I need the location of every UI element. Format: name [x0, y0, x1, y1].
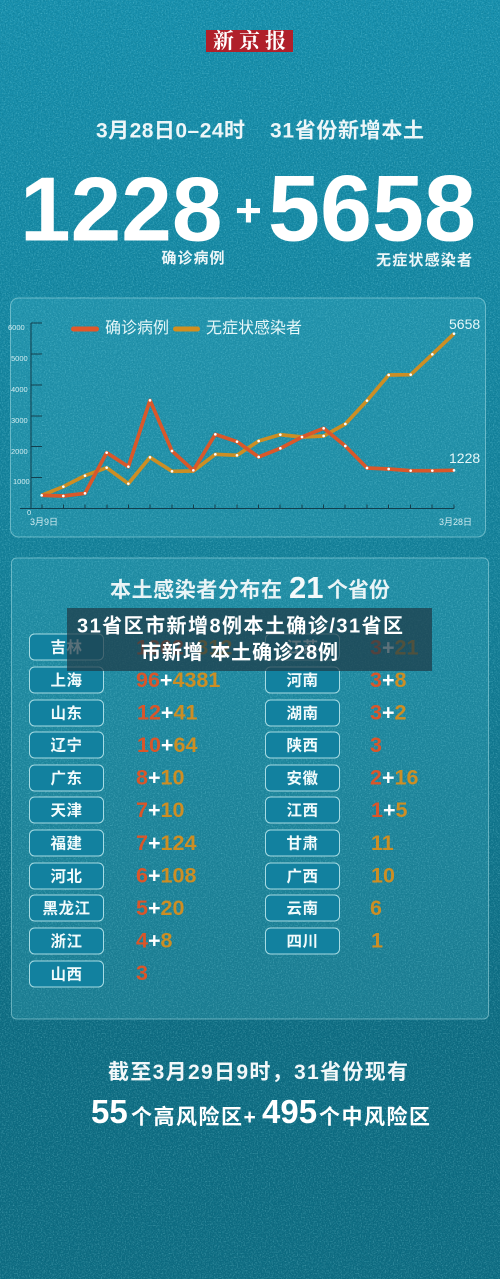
row: 黑龙江: 黑龙江 [42, 900, 91, 918]
y axis labels: 3000 [11, 416, 28, 425]
label: confirmed cases: 确诊病例 [162, 249, 224, 267]
row: 上海 [30, 667, 220, 693]
chart legend: 无症状感染者 [206, 319, 302, 337]
row: 山东: 山东 [50, 704, 83, 722]
x axis labels: 3月28日 [439, 517, 472, 527]
row: 陕西: 3 [370, 733, 382, 757]
logo: 新京报: 新京报 [213, 25, 286, 55]
row: 吉林 [30, 634, 232, 660]
row: 江苏: 江苏 [286, 638, 319, 656]
end value: confirmed: 1228 [449, 450, 480, 466]
footer line: as of date: 截至3月29日9时，31省份现有 [108, 1061, 408, 1084]
row: 福建 [30, 830, 196, 856]
row: 河南 [266, 667, 407, 693]
row: 江西: 1+5 [371, 798, 408, 822]
row: 甘肃: 甘肃 [286, 834, 319, 852]
footer line: risk areas [91, 1093, 432, 1130]
row: 浙江: 4+8 [136, 928, 173, 952]
row: 吉林: 吉林 [50, 638, 83, 656]
line: asymptomatic [42, 332, 455, 495]
row: 辽宁 [30, 732, 197, 758]
row: 四川: 1 [371, 928, 383, 952]
big number: asymptomatic cases: 5658 [268, 156, 476, 260]
row: 浙江: 浙江 [50, 932, 83, 950]
panel heading: 本土感染者分布在 [110, 578, 282, 602]
row: 山西 [30, 961, 148, 987]
row: 天津: 7+10 [136, 798, 184, 822]
row: 上海: 96+4381 [136, 668, 220, 692]
row: 广东: 广东 [50, 768, 83, 788]
heading: new local cases: 31省份新增本土 [270, 118, 424, 142]
row: 黑龙江 [30, 895, 184, 921]
row: 江西: 江西 [286, 802, 319, 820]
row: 广东 [30, 765, 184, 791]
row: 广西: 广西 [286, 868, 319, 886]
row: 山西: 3 [136, 961, 148, 985]
y axis labels: 6000 [8, 323, 25, 332]
row: 湖南: 湖南 [286, 704, 319, 722]
y axis labels: 1000 [13, 477, 30, 486]
row: 黑龙江: 5+20 [136, 896, 184, 920]
y axis labels: 4000 [11, 385, 28, 394]
y axis labels: 2000 [11, 447, 28, 456]
row: 山东 [30, 700, 197, 726]
x axis labels [30, 517, 472, 527]
footer line: risk areas: 55 [91, 1093, 128, 1130]
y axis labels: 5000 [11, 354, 28, 363]
panel heading: 21 [289, 570, 323, 605]
row: 辽宁: 辽宁 [50, 736, 83, 754]
label: asymptomatic cases: 无症状感染者 [376, 251, 472, 269]
row: 上海: 上海 [50, 672, 83, 690]
row: 辽宁: 10+64 [137, 733, 197, 757]
row: 广西: 10 [371, 864, 395, 888]
row: 河南: 3+8 [370, 668, 407, 692]
row: 吉林: 1262+312 [136, 636, 232, 660]
row: 河南: 河南 [286, 672, 319, 690]
row: 天津: 天津 [50, 802, 83, 820]
row: 福建: 福建 [50, 834, 83, 852]
row: 安徽: 2+16 [370, 766, 418, 790]
row: 四川 [266, 928, 383, 954]
row: 云南: 6 [370, 896, 382, 920]
footer line: risk areas: 495 [262, 1093, 317, 1130]
row: 天津 [30, 797, 184, 823]
footer line: risk areas: 个中风险区 [319, 1105, 432, 1129]
panel heading: 个省份 [327, 579, 390, 602]
row: 安徽: 安徽 [286, 770, 319, 788]
row: 安徽 [266, 765, 418, 791]
row: 广西 [266, 863, 395, 889]
row: 湖南: 3+2 [370, 700, 407, 724]
panel heading [110, 570, 390, 605]
row: 云南: 云南 [286, 900, 319, 918]
row: 浙江 [30, 928, 173, 954]
y axis labels: 0 [27, 508, 31, 517]
x axis labels: 3月9日 [30, 517, 58, 527]
row: 陕西: 陕西 [286, 736, 319, 754]
row: 甘肃 [266, 830, 394, 856]
row: 江苏 [266, 634, 418, 660]
row: 江苏: 3+21 [370, 636, 418, 660]
headline overlay [67, 608, 432, 671]
end value: asymptomatic: 5658 [449, 316, 480, 332]
row: 四川: 四川 [286, 934, 319, 950]
panel: line chart [8, 298, 486, 537]
row: 福建: 7+124 [136, 831, 196, 855]
chart legend [71, 319, 302, 337]
row: 山东: 12+41 [137, 700, 197, 724]
row: 山西: 山西 [50, 966, 83, 984]
heading: date and scope: 3月28日0–24时 [96, 120, 245, 142]
row: 河北 [30, 863, 196, 889]
row: 广东: 8+10 [136, 766, 184, 790]
line: confirmed [40, 399, 455, 497]
row: 云南 [266, 895, 382, 921]
row: 河北: 河北 [50, 868, 83, 886]
chart axes [20, 323, 454, 508]
chart legend: 确诊病例 [105, 319, 169, 337]
row: 湖南 [266, 700, 407, 726]
big number: confirmed cases: 1228 [20, 160, 222, 260]
y axis labels [8, 323, 31, 517]
row: 甘肃: 11 [371, 831, 394, 855]
headline overlay: 市新增 本土确诊28例 [141, 640, 338, 664]
footer line: risk areas: 个高风险区+ [131, 1105, 257, 1129]
panel: distribution by province [12, 558, 488, 1019]
row: 河北: 6+108 [136, 864, 196, 888]
row: 陕西 [266, 732, 382, 758]
headline overlay: 31省区市新增8例本土确诊/31省区 [77, 614, 403, 638]
row: 江西 [266, 797, 408, 823]
plus sign: + [235, 184, 262, 236]
